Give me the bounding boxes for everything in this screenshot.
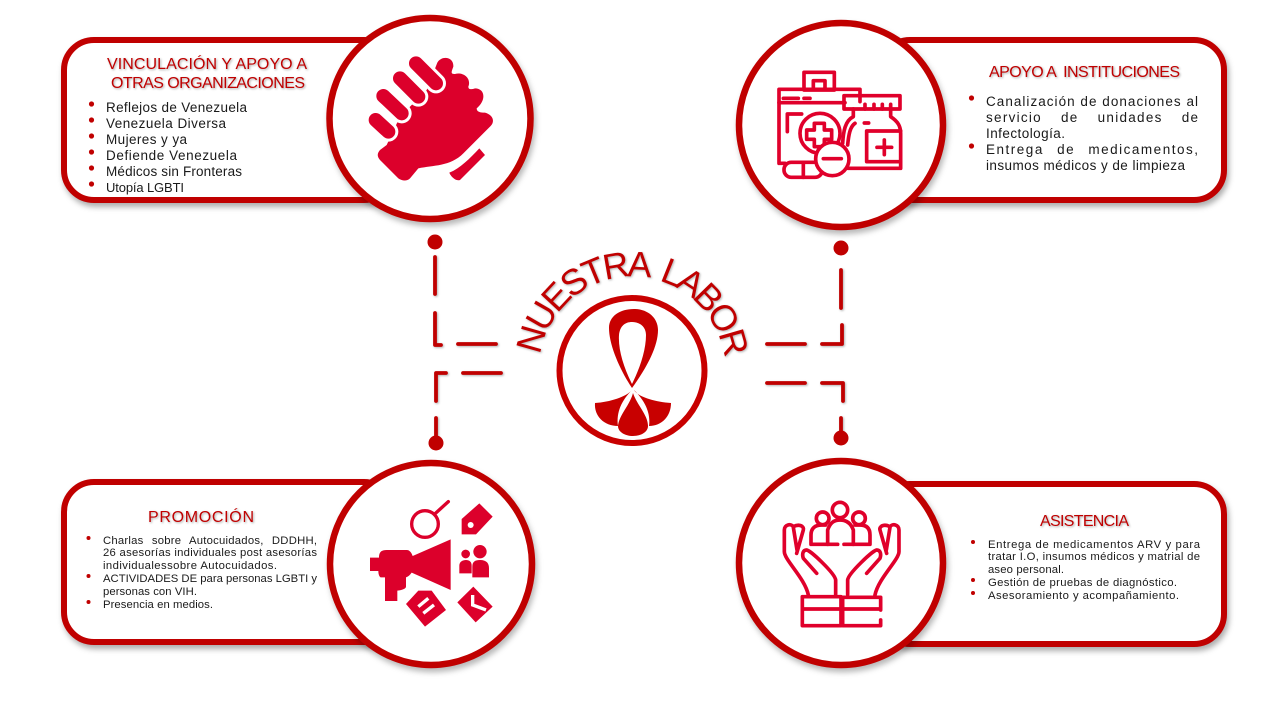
list: promoción: personas con VIH. — [103, 586, 197, 598]
panel: asistencia — [739, 461, 1224, 665]
connector: bottom left — [428, 373, 501, 450]
list: asistencia: Entrega de medicamentos ARV y para — [988, 539, 1201, 551]
awareness ribbon — [595, 309, 671, 436]
panel: promoción — [64, 463, 532, 665]
list: organizaciones — [89, 100, 247, 195]
circle: promoción — [330, 463, 532, 665]
list: promoción — [86, 535, 317, 611]
connector: top left — [428, 234, 496, 345]
icon: medical kit and bottle — [779, 72, 901, 177]
list: organizaciones: Reflejos de Venezuela — [106, 100, 247, 115]
list: apoyo: Infectología. — [986, 126, 1065, 141]
panel: apoyo a instituciones — [739, 23, 1224, 227]
list: asistencia: aseo personal. — [988, 564, 1064, 576]
logo ring — [560, 298, 704, 443]
heading: vinculación — [107, 54, 307, 92]
list: promoción: Presencia en medios. — [103, 599, 213, 611]
list: promoción: ACTIVIDADES DE para personas LGBTI y — [103, 573, 317, 585]
heading: vinculación: OTRAS ORGANIZACIONES — [111, 75, 305, 92]
list: apoyo: insumos médicos y de limpieza — [986, 158, 1185, 173]
list: organizaciones: Utopía LGBTI — [106, 180, 184, 195]
list: promoción: 26 asesorías individuales post asesorías — [103, 547, 317, 559]
list: promoción: Charlas sobre Autocuidados, DDDHH, — [103, 535, 317, 547]
list: asistencia — [971, 539, 1201, 602]
circle: asistencia — [739, 461, 943, 665]
connector: top right — [767, 240, 848, 344]
list: apoyo: Entrega de medicamentos, — [986, 142, 1198, 157]
panel box — [880, 484, 1224, 644]
panel box — [880, 40, 1224, 200]
list: apoyo: servicio de unidades de — [986, 110, 1198, 125]
heading: promoción: PROMOCIÓN — [148, 507, 254, 526]
heading: asistencia: ASISTENCIA — [1040, 513, 1129, 530]
circle: vinculación — [330, 18, 530, 219]
heading: vinculación: VINCULACIÓN Y APOYO A — [107, 54, 307, 73]
list: organizaciones: Médicos sin Fronteras — [106, 164, 242, 179]
list: asistencia: Asesoramiento y acompañamiento. — [988, 590, 1179, 602]
panel box — [64, 482, 394, 642]
circle: instituciones — [739, 23, 943, 227]
list: organizaciones: Venezuela Diversa — [106, 116, 226, 131]
panel: vinculación y apoyo — [64, 18, 530, 219]
panel box — [64, 40, 394, 200]
list: asistencia: tratar I.O, insumos médicos y matrial de — [988, 551, 1200, 563]
title: nuestra labor: NUESTRA LABOR — [516, 252, 749, 358]
icon: clasped fist — [376, 58, 493, 180]
list: apoyo: Canalización de donaciones al — [986, 94, 1198, 109]
list: promoción: individualessobre Autocuidados. — [103, 560, 277, 572]
center emblem — [516, 252, 749, 446]
list: organizaciones: Mujeres y ya — [106, 132, 187, 147]
icon: megaphone and marketing symbols — [370, 502, 493, 627]
heading: instituciones: APOYO A INSTITUCIONES — [989, 64, 1180, 81]
list: asistencia: Gestión de pruebas de diagnóstico. — [988, 577, 1177, 589]
connector: bottom right — [767, 383, 848, 446]
icon: hands holding people — [784, 502, 899, 626]
list: organizaciones: Defiende Venezuela — [106, 148, 237, 163]
list: apoyo — [969, 94, 1198, 173]
